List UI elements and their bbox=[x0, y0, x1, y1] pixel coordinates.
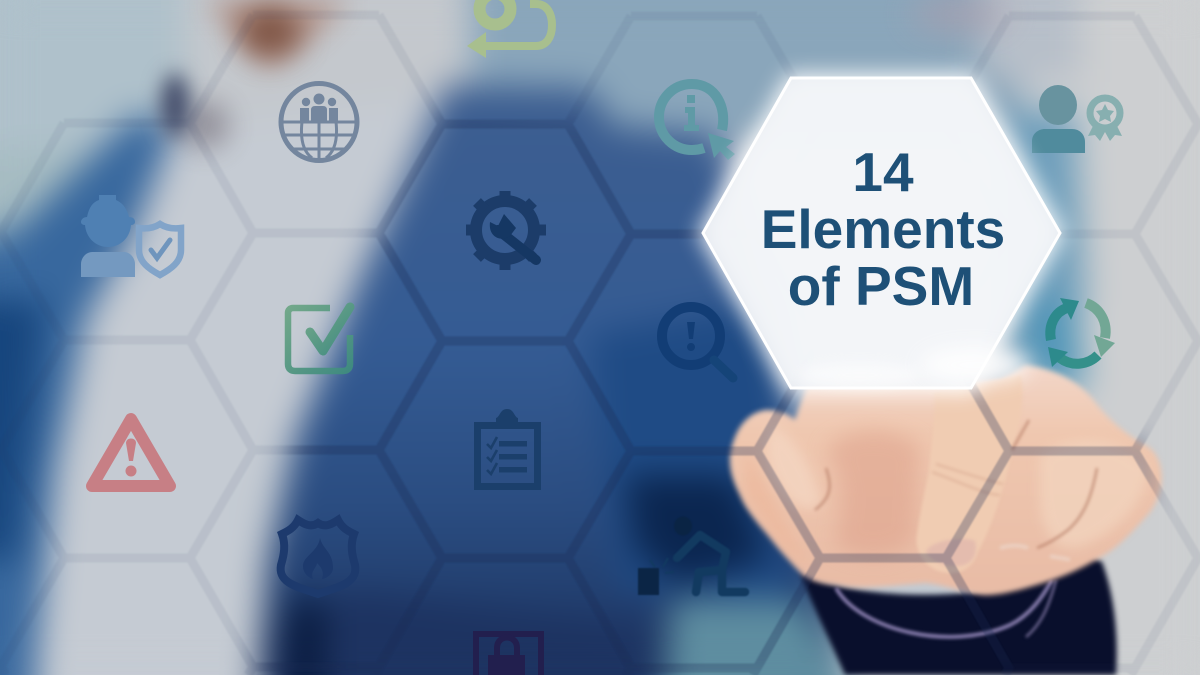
icon: person with award rosette bbox=[1032, 85, 1122, 153]
icon: warning triangle bbox=[92, 419, 170, 486]
jacket sleeve and cuff bbox=[800, 556, 1117, 675]
title: of PSM bbox=[788, 255, 974, 317]
icon: gear with return arrow bbox=[467, 0, 552, 58]
hand pointing at hexagon bbox=[730, 208, 1162, 595]
honeycomb grid of hexagons, stronger over jacket and hand bbox=[258, 116, 1163, 675]
icon: gear and wrench bbox=[466, 191, 546, 270]
icon: checklist clipboard bbox=[474, 409, 541, 490]
icon: green checkbox bbox=[288, 307, 350, 371]
icon: magnifying glass with exclamation bbox=[662, 307, 733, 378]
title: 14 bbox=[852, 141, 914, 203]
icon: padlock document bbox=[476, 634, 541, 675]
background: blurred face and collar bbox=[161, 0, 1010, 149]
icon: information with cursor bbox=[659, 84, 735, 160]
icon: worker with hard hat and safety shield bbox=[81, 195, 181, 277]
icon: person breaking through hazard bbox=[638, 516, 745, 595]
title: Elements bbox=[761, 198, 1005, 260]
icon: fire shield badge bbox=[281, 520, 355, 594]
icon: recycling arrows bbox=[1048, 298, 1115, 367]
title bbox=[761, 141, 1005, 317]
icon: globe with people bbox=[281, 84, 357, 160]
highlighted title hexagon bbox=[703, 78, 1060, 388]
